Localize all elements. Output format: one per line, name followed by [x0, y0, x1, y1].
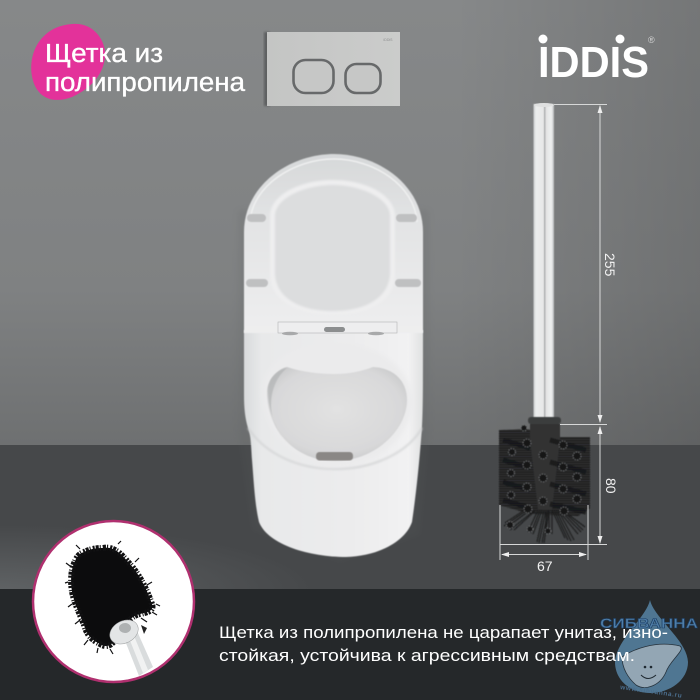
dimension 80: [500, 426, 619, 544]
dimension 67: 67: [537, 558, 553, 574]
bristle mass: [499, 429, 590, 516]
brush head: [499, 417, 590, 543]
toilet: [238, 154, 429, 562]
dimension 67: [500, 505, 588, 574]
dimensions: [500, 104, 619, 574]
dimension 255: [554, 104, 618, 424]
inset collar disc: [106, 615, 142, 649]
seat lid: [275, 185, 390, 311]
flush button: large: [294, 60, 334, 93]
logo: ®: [648, 35, 655, 45]
description text: Щетка из полипропилена не царапает унитаз, изно-: [219, 624, 668, 642]
bowl: [267, 367, 407, 461]
watermark url: www.sibvanna.ru: [619, 684, 682, 700]
bottom text band: [0, 589, 700, 700]
hinge: [278, 322, 397, 335]
bristle tuft strays: [65, 541, 160, 654]
heading: полипропилена: [45, 69, 246, 97]
flush plate: iDDiS: [384, 38, 393, 42]
dimension 80: 80: [603, 478, 619, 494]
bristle tufts: [503, 440, 586, 512]
background: wall: [0, 0, 700, 445]
bristle fringe: [71, 548, 152, 646]
bristle rosettes: [506, 425, 581, 534]
watermark name: СИБВАННА: [600, 616, 698, 631]
watermark drop: [615, 600, 688, 693]
drain: [316, 452, 353, 460]
heading: Щетка из: [45, 40, 163, 68]
description text: стойкая, устойчива к агрессивным средствам.: [219, 647, 635, 665]
description text: [219, 624, 668, 665]
watermark: [600, 600, 698, 700]
flush plate: [264, 32, 400, 106]
seat top ridge: [250, 159, 417, 222]
lower splayed bristles: [504, 505, 585, 543]
toilet shadow: [238, 210, 429, 562]
dimension 255: 255: [602, 253, 618, 277]
bristle tip near collar: [141, 625, 147, 634]
brush handle: [534, 103, 554, 420]
flush button: small: [346, 64, 380, 93]
toilet body: [244, 330, 423, 557]
inset handle: [120, 622, 153, 676]
seat bumper slots: [246, 214, 421, 287]
background: floor: [0, 445, 700, 590]
seat: [244, 154, 423, 333]
seat lid ridge: [270, 180, 395, 315]
collar and hub: [528, 417, 561, 510]
rim edge: [248, 428, 422, 469]
logo: IDDIS: [538, 38, 649, 87]
bowl inner left shade: [268, 368, 289, 446]
heading: [45, 40, 246, 97]
watermark tub: [622, 644, 681, 687]
pink blob: [31, 24, 105, 100]
circle inset: brush close-up: [33, 521, 194, 682]
inset bristle head: [65, 541, 160, 654]
bowl lip ring: [262, 342, 412, 466]
